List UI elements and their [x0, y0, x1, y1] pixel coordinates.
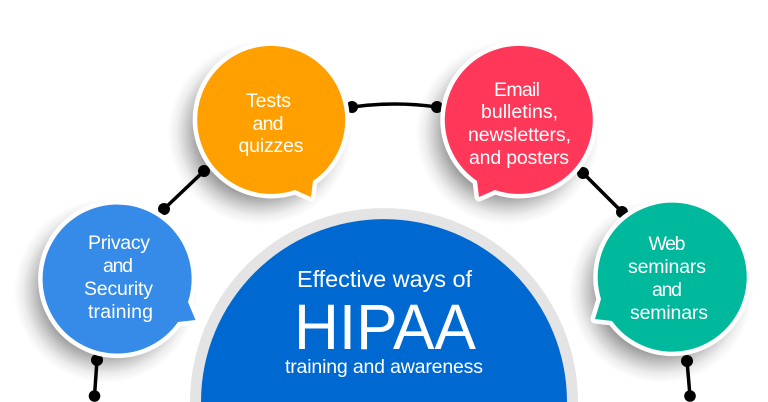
- label: web seminars and seminars: seminars: [628, 256, 706, 278]
- label: email bulletins, newsletters, and posters: newsletters,: [468, 124, 571, 146]
- heading: effective ways of: Effective ways of: [297, 266, 472, 292]
- connector: privacy downward: [89, 354, 103, 402]
- connector: tests to email: [346, 101, 443, 113]
- label: privacy and security training: training: [88, 301, 153, 323]
- label: web seminars and seminars: Web: [648, 233, 686, 255]
- connector: web seminars downward: [681, 355, 696, 402]
- label: tests and quizzes: Tests: [246, 90, 291, 112]
- panel: central HIPAA semicircle: [190, 208, 578, 402]
- connector: privacy to tests: [158, 165, 210, 215]
- label: web seminars and seminars: and: [652, 279, 682, 301]
- label: email bulletins, newsletters, and posters: bulletins,: [481, 101, 558, 123]
- label: tests and quizzes: quizzes: [238, 135, 304, 157]
- label: email bulletins, newsletters, and posters: and posters: [469, 147, 569, 169]
- label: email bulletins, newsletters, and posters: [468, 79, 571, 169]
- panel: email bulletins, newsletters, and posters: [445, 46, 593, 197]
- label: tests and quizzes: and: [252, 113, 284, 135]
- panel: web seminars and seminars: [595, 203, 747, 352]
- heading: training and awareness: training and awareness: [285, 356, 483, 378]
- panel: tests and quizzes: [197, 46, 345, 197]
- label: tests and quizzes: [238, 90, 304, 157]
- label: privacy and security training: [84, 232, 153, 323]
- label: web seminars and seminars: seminars: [630, 302, 708, 324]
- connector: email to web seminars: [577, 167, 628, 218]
- label: privacy and security training: Privacy: [88, 232, 150, 254]
- heading: HIPAA: HIPAA: [294, 291, 476, 363]
- label: email bulletins, newsletters, and posters: Email: [494, 79, 540, 101]
- panel: privacy and security training: [43, 205, 195, 354]
- label: privacy and security training: and: [103, 255, 133, 277]
- label: privacy and security training: Security: [84, 278, 153, 300]
- label: web seminars and seminars: [628, 233, 708, 324]
